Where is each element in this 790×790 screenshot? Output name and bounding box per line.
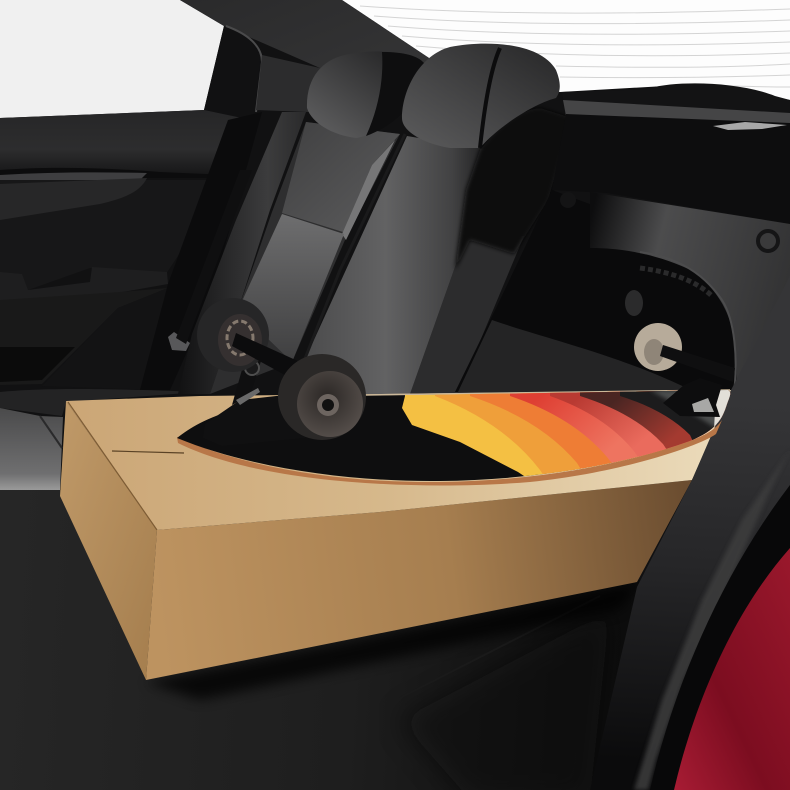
side panel xyxy=(590,192,790,392)
box left edge xyxy=(68,402,157,530)
rear parcel shelf xyxy=(552,83,790,224)
front axle xyxy=(232,333,300,380)
dark gap beside seat xyxy=(140,112,262,390)
skateboard xyxy=(177,299,735,486)
light centre strip xyxy=(342,140,395,240)
seat back: left xyxy=(168,112,400,394)
door mid panel xyxy=(0,180,228,300)
seam between seats xyxy=(302,134,405,366)
box top seam xyxy=(112,451,184,453)
armrest xyxy=(0,267,168,302)
box front face xyxy=(146,480,692,680)
front wheel back xyxy=(197,298,269,372)
trunk side wall xyxy=(455,190,790,394)
front truck baseplate xyxy=(203,395,310,446)
roof lining and C pillar xyxy=(180,0,432,112)
door panel xyxy=(0,110,262,390)
trunk floor xyxy=(457,320,695,394)
pillar trim body xyxy=(590,276,790,790)
right upper bolster xyxy=(455,108,572,270)
black fade band xyxy=(620,390,730,440)
dark red band xyxy=(580,390,730,449)
right centre panel xyxy=(300,136,490,394)
trim button xyxy=(758,231,778,251)
ribbed trim xyxy=(640,268,712,296)
box top face xyxy=(66,390,732,530)
cardboard box xyxy=(60,390,732,700)
dark trunk recess xyxy=(455,190,740,392)
rear wheel xyxy=(634,323,682,371)
box contact shadow xyxy=(146,582,640,700)
deck colour stripes xyxy=(402,390,730,476)
orange band xyxy=(435,392,730,474)
tail tip xyxy=(714,390,730,426)
pillar highlight xyxy=(634,450,790,790)
door handle strip xyxy=(0,172,147,184)
deck top rim xyxy=(365,390,730,395)
rear truck xyxy=(663,378,722,417)
lower centre panel xyxy=(238,214,344,362)
deck wood edge xyxy=(177,420,722,485)
upper door trim xyxy=(0,110,242,176)
left outer bolster xyxy=(178,112,306,394)
front truck hanger xyxy=(232,352,262,405)
right lower bolster xyxy=(410,236,524,394)
red car body xyxy=(674,548,790,790)
salmon band xyxy=(550,391,722,456)
black gap xyxy=(650,485,790,790)
rear axle xyxy=(660,345,735,382)
headrest: left xyxy=(307,52,424,138)
red band xyxy=(510,392,730,463)
rear windshield with defroster lines xyxy=(342,0,790,100)
deck black graphic xyxy=(177,390,730,481)
seat back: right xyxy=(300,108,572,394)
upper centre panel xyxy=(282,122,400,232)
lower door and outer seat cushion xyxy=(0,389,200,490)
front wheel forward xyxy=(278,354,366,440)
grey tail xyxy=(652,390,730,428)
yellow band xyxy=(402,392,730,476)
dark orange band xyxy=(470,392,730,469)
headrest: right xyxy=(402,44,560,148)
rear side window xyxy=(0,0,224,118)
door lower panel xyxy=(0,288,168,385)
box left face xyxy=(60,401,157,680)
door sill and right side trim xyxy=(590,276,790,790)
belt buckle xyxy=(168,332,190,351)
seat belt xyxy=(176,170,252,344)
folded seat floor carpet xyxy=(0,490,640,790)
